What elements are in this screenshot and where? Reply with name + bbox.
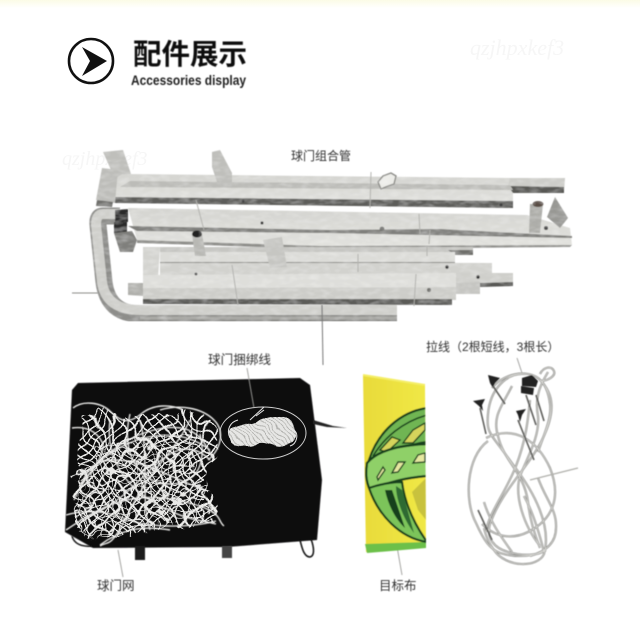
goal frame tube bundle (96, 150, 572, 318)
net mesh (72, 412, 218, 538)
ball dome (369, 408, 427, 464)
label: goal tube set: 球门组合管 (291, 148, 351, 163)
subtitle: Accessories display (131, 72, 246, 88)
cloth straps (72, 420, 347, 560)
title: 配件展示 (133, 39, 247, 71)
wire: frame ties (72, 172, 430, 365)
watermark text (62, 35, 564, 170)
net loose loops (66, 403, 224, 546)
watermark text: qzjhpxkef3 (62, 148, 148, 170)
bracket: top left (103, 150, 132, 179)
label: target cloth: 目标布 (379, 579, 417, 593)
black cloth (65, 378, 322, 548)
hook plate (378, 173, 396, 189)
stub posts (192, 197, 568, 268)
panel: target cloth (363, 375, 427, 553)
wire loops (469, 368, 556, 564)
bracket: second (212, 150, 232, 187)
ball fan (369, 482, 427, 542)
long straight strand (530, 468, 578, 480)
olive shade (412, 478, 426, 520)
panel: guy wire bundle (469, 368, 578, 564)
watermark text: qzjhpxkef3 (470, 35, 564, 60)
third tube stack (128, 247, 513, 305)
second long beam (114, 208, 572, 252)
curved round pipe (96, 214, 397, 318)
label: guy wires: 拉线（2根短线，3根长） (426, 339, 559, 354)
ball band (366, 444, 427, 490)
icon: arrow in circle (69, 39, 113, 83)
wire clamps (473, 375, 538, 422)
panel: black bag with net (65, 378, 347, 560)
green ball graphic (366, 408, 427, 542)
label: tie rope: 球门捆绑线 (208, 353, 271, 367)
top edge band (0, 0, 640, 8)
label: net: 球门网 (97, 578, 135, 593)
oval tie rope bundle (220, 407, 306, 459)
leader lines (118, 358, 522, 577)
first long beam (96, 168, 565, 208)
